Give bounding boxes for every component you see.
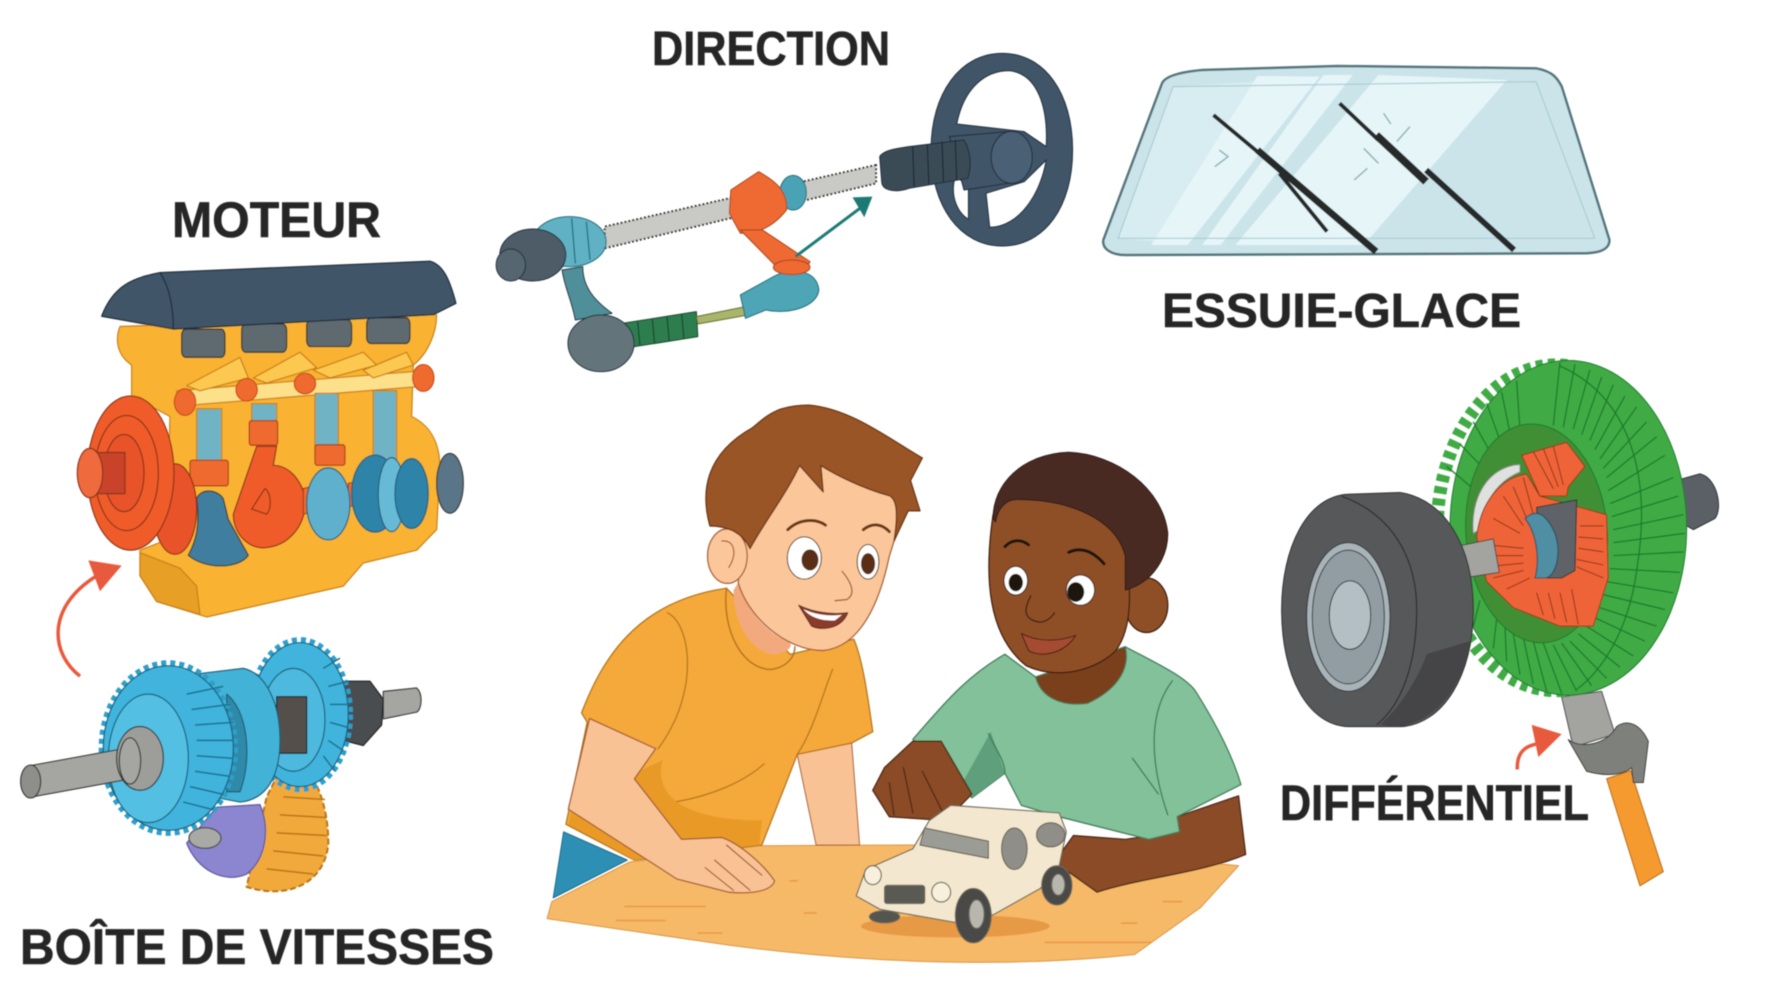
center gray block xyxy=(1537,500,1577,578)
left tint xyxy=(1118,82,1257,242)
rear pulley xyxy=(153,464,197,554)
mouth xyxy=(799,605,848,628)
hair xyxy=(993,452,1168,590)
left shaft xyxy=(28,748,130,797)
brows xyxy=(1005,541,1104,564)
ear xyxy=(1125,578,1168,632)
sleeve shade xyxy=(962,732,1005,798)
gear ribs xyxy=(1447,362,1685,693)
windshield xyxy=(920,828,988,858)
red gears xyxy=(1477,474,1608,626)
table xyxy=(547,845,1239,962)
purple gear hub xyxy=(189,828,221,848)
engine block xyxy=(117,315,440,617)
back wheel xyxy=(1042,866,1072,905)
right end cap xyxy=(437,454,463,513)
shaft clamp xyxy=(1568,723,1648,782)
thin rod xyxy=(696,307,748,324)
crank pins xyxy=(303,478,373,514)
green spring xyxy=(623,312,698,347)
dark nut xyxy=(343,681,383,746)
steering hub xyxy=(949,132,1030,190)
orange gear xyxy=(247,751,328,891)
mouth xyxy=(1021,634,1076,654)
illustration: gearbox xyxy=(21,640,421,891)
head xyxy=(738,447,908,651)
rear wheels xyxy=(869,911,900,923)
label: différentiel: DIFFÉRENTIEL xyxy=(1280,775,1589,831)
car body xyxy=(856,805,1066,922)
lower shaft xyxy=(1562,691,1615,747)
neck xyxy=(734,583,791,654)
car shadow xyxy=(861,915,1050,938)
main blue gear teeth xyxy=(102,663,235,833)
yellow shirt xyxy=(566,588,873,860)
headlights xyxy=(864,866,881,885)
main pulley xyxy=(87,396,174,550)
orange bracket xyxy=(729,172,787,233)
illustration: differential xyxy=(1282,360,1719,886)
front wheel xyxy=(955,888,991,943)
label: boîte de vitesses: BOÎTE DE VITESSES xyxy=(20,919,494,975)
eyes xyxy=(1004,566,1095,605)
red gear ribs xyxy=(1483,446,1603,624)
gear cavity xyxy=(1456,416,1617,651)
eyes xyxy=(787,537,879,579)
crank blue lobe xyxy=(188,491,248,566)
illustration: windshield xyxy=(1103,66,1609,255)
tire xyxy=(1282,492,1473,727)
rim xyxy=(1307,543,1390,691)
nose xyxy=(1026,596,1054,622)
pointing arm xyxy=(873,741,972,820)
right blue gear xyxy=(252,643,348,787)
rocker bars xyxy=(177,370,430,406)
center teal bevel xyxy=(1525,513,1558,578)
teal ring xyxy=(780,175,806,210)
grille xyxy=(885,885,925,904)
glass xyxy=(1103,66,1609,255)
inner shaft xyxy=(277,697,307,753)
table grain xyxy=(616,881,1182,942)
orange ball xyxy=(773,260,810,275)
main blue gear xyxy=(103,666,233,830)
main rack xyxy=(605,165,876,248)
silver bearing xyxy=(1473,465,1520,533)
steering wheel xyxy=(931,53,1073,246)
axle to wheel xyxy=(1457,539,1499,578)
finger lines xyxy=(705,845,762,890)
right stub axle xyxy=(1680,474,1719,530)
shirt folds xyxy=(658,613,833,802)
tie rod end xyxy=(568,315,634,372)
link arm xyxy=(562,267,612,320)
pistons xyxy=(197,391,397,470)
blue counterweights xyxy=(307,455,428,540)
finger lines xyxy=(889,768,946,819)
nose xyxy=(835,571,852,601)
shirt folds xyxy=(988,681,1172,815)
orange collars xyxy=(190,421,345,486)
boy right xyxy=(873,452,1246,892)
wiper left xyxy=(1213,115,1376,252)
tire shade xyxy=(1380,641,1470,727)
head xyxy=(989,481,1130,673)
label: moteur: MOTEUR xyxy=(172,192,381,248)
orange gear ribs xyxy=(267,781,327,874)
label: essuie-glace: ESSUIE-GLACE xyxy=(1162,285,1521,338)
left end nut xyxy=(500,229,566,281)
reflections xyxy=(1151,75,1507,245)
middle blue gear xyxy=(200,668,280,802)
right shaft xyxy=(383,688,421,719)
green arrow xyxy=(795,197,872,257)
pulley shaft xyxy=(95,452,125,494)
top red gear xyxy=(1522,442,1585,496)
ring gear xyxy=(1450,360,1687,695)
main gear ribs xyxy=(183,686,233,810)
tire tread line xyxy=(1342,496,1417,725)
wiper right xyxy=(1340,103,1514,250)
right gear ribs xyxy=(323,658,350,771)
jeans xyxy=(553,832,627,898)
rocker linkage xyxy=(187,352,413,391)
ear xyxy=(708,529,747,583)
rocker joints xyxy=(174,365,434,415)
boy left xyxy=(553,405,922,898)
purple gear xyxy=(187,805,265,877)
side windows xyxy=(1002,828,1027,870)
arrow: gearbox to engine xyxy=(58,560,122,676)
illustration: steering xyxy=(496,53,1073,372)
differential arrow xyxy=(1517,725,1562,769)
teal joint ribs xyxy=(572,218,590,263)
boot ribs xyxy=(913,140,957,187)
column boot xyxy=(880,140,970,191)
near arm and hand xyxy=(568,719,775,893)
brows xyxy=(788,521,889,532)
label: direction: DIRECTION xyxy=(652,23,890,76)
glass marks xyxy=(1215,113,1410,180)
hair xyxy=(706,405,922,549)
green shirt xyxy=(913,647,1241,839)
valve cover xyxy=(102,261,456,329)
toy car xyxy=(856,805,1072,943)
spring ribs xyxy=(638,314,684,345)
block shadow side xyxy=(140,553,200,614)
orange rod xyxy=(1607,771,1663,886)
orange arm xyxy=(740,230,810,271)
crank red lobe xyxy=(233,446,305,548)
collar xyxy=(726,588,795,669)
left teal joint xyxy=(533,217,606,267)
illustration: engine xyxy=(77,261,463,617)
hub xyxy=(1329,581,1371,649)
gear outer band line xyxy=(1560,366,1641,689)
right hand arm xyxy=(1054,796,1246,892)
shaft collar xyxy=(117,726,163,790)
right blue gear teeth xyxy=(250,640,350,789)
spark plug caps xyxy=(182,318,410,357)
gear teeth xyxy=(1437,365,1676,691)
inner frame line xyxy=(1118,82,1595,238)
teal tie rod joint xyxy=(740,271,819,318)
far arm xyxy=(797,741,860,845)
illustration: two boys with toy car xyxy=(547,405,1246,962)
shirt shade xyxy=(568,760,762,860)
neck xyxy=(1036,647,1126,704)
